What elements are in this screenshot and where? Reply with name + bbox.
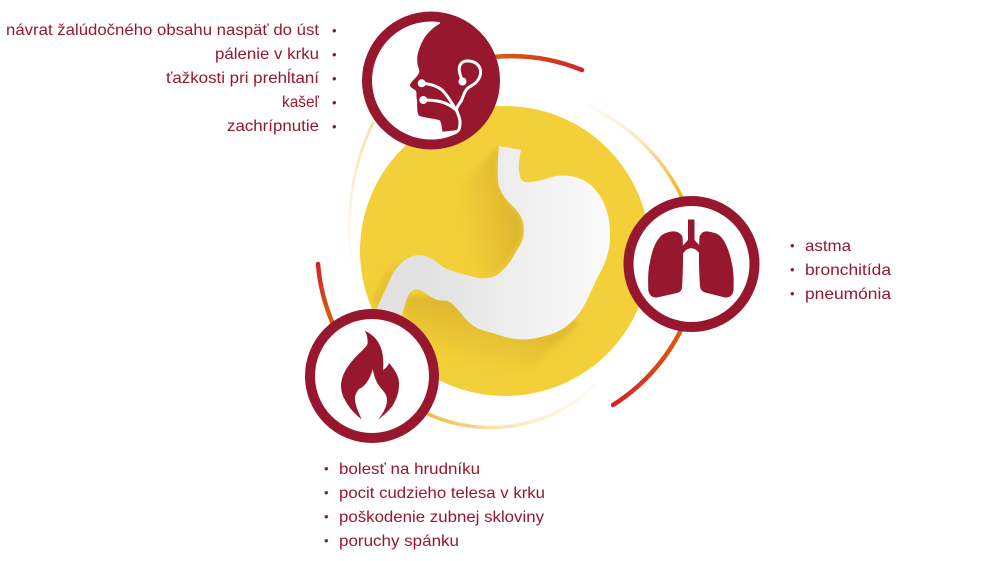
- list: throat symptoms: kašeľ: [282, 94, 319, 111]
- list: lung symptoms: pneumónia: [805, 286, 891, 303]
- list: lung symptoms: [790, 238, 891, 303]
- list: throat symptoms: •: [332, 23, 337, 38]
- list: chest symptoms: •: [324, 461, 329, 476]
- list: throat symptoms: zachrípnutie: [227, 118, 319, 135]
- list: throat symptoms: •: [332, 47, 337, 62]
- icon: lungs: [628, 201, 754, 327]
- list: lung symptoms: •: [790, 286, 795, 301]
- list: chest symptoms: pocit cudzieho telesa v krku: [339, 485, 545, 502]
- icon: flame: [310, 314, 434, 438]
- list: throat symptoms: •: [332, 119, 337, 134]
- list: chest symptoms: •: [324, 509, 329, 524]
- list: chest symptoms: •: [324, 533, 329, 548]
- list: lung symptoms: •: [790, 262, 795, 277]
- list: throat symptoms: •: [332, 95, 337, 110]
- list: lung symptoms: bronchitída: [805, 262, 891, 279]
- list: chest symptoms: poškodenie zubnej skloviny: [339, 509, 544, 526]
- list: lung symptoms: •: [790, 238, 795, 253]
- list: chest symptoms: bolesť na hrudníku: [339, 461, 480, 478]
- list: throat symptoms: •: [332, 71, 337, 86]
- stomach: [376, 146, 610, 340]
- list: throat symptoms: ťažkosti pri prehĺtaní: [166, 68, 320, 87]
- list: chest symptoms: [324, 461, 545, 550]
- list: throat symptoms: [6, 22, 337, 135]
- list: throat symptoms: pálenie v krku: [215, 46, 319, 63]
- icon: face with throat nerves: [362, 12, 500, 150]
- list: throat symptoms: návrat žalúdočného obsahu naspäť do úst: [6, 22, 320, 39]
- stomach long shadows: [372, 146, 580, 372]
- list: lung symptoms: astma: [805, 238, 851, 255]
- decorative ring arcs: [318, 56, 684, 428]
- list: chest symptoms: •: [324, 485, 329, 500]
- yellow central circle: [360, 106, 650, 396]
- list: chest symptoms: poruchy spánku: [339, 533, 459, 550]
